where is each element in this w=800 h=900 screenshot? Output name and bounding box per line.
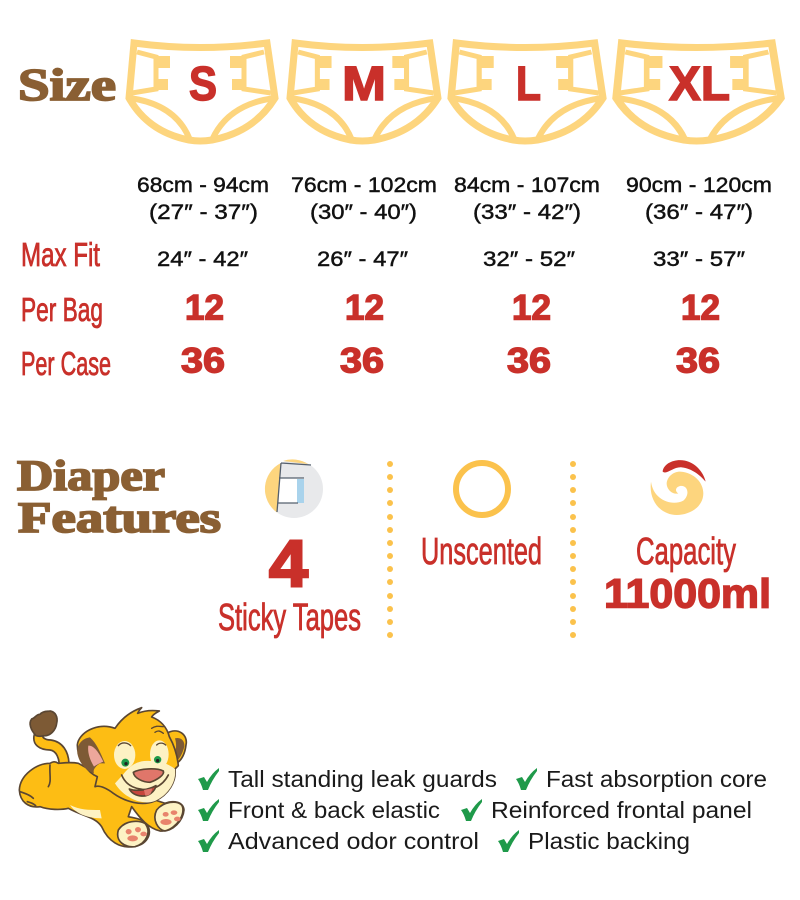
feature: capacity: 11000ml (604, 570, 771, 616)
diaper size L (451, 43, 603, 141)
feature list with check marks: Reinforced frontal panel (491, 797, 752, 823)
divider: dotted left (387, 461, 393, 638)
heading: Diaper Features: Diaper (17, 453, 165, 500)
row: Per Bag: 12 (512, 288, 551, 328)
row: Per Bag (21, 288, 720, 328)
waist measurements row: (30″ - 40″) (310, 201, 417, 224)
row: Max Fit (21, 236, 746, 273)
feature list with check marks: Fast absorption core (546, 766, 767, 792)
waist measurements row: 90cm - 120cm (626, 174, 772, 197)
feature: 4 sticky tapes: Sticky Tapes (218, 597, 361, 639)
diaper size XL: XL (669, 58, 730, 111)
eyes (114, 741, 135, 769)
waist measurements row (137, 174, 772, 224)
heading: Size: Size (18, 59, 116, 110)
front paws (118, 821, 148, 847)
feature list with check marks: Front & back elastic (228, 797, 440, 823)
row: Per Case (21, 342, 720, 382)
icon: sticky tape (265, 459, 323, 518)
brows and forelock (118, 726, 166, 746)
diaper size L: L (516, 58, 541, 111)
diaper size M (290, 43, 438, 141)
toe pads (126, 810, 181, 841)
body (19, 762, 184, 847)
row: Max Fit: 24″ - 42″ (157, 248, 249, 271)
diaper size M: M (342, 58, 386, 111)
row: Per Case: 36 (676, 342, 720, 380)
nose (133, 769, 164, 782)
waist measurements row: (33″ - 42″) (473, 201, 581, 224)
icon: absorption swirl (651, 460, 706, 515)
hind leg line (20, 765, 50, 806)
feature: capacity: Capacity (636, 531, 736, 573)
row: Max Fit: Max Fit (21, 236, 100, 273)
tail (34, 734, 69, 767)
check: plastic backing (498, 830, 519, 852)
waist measurements row: 76cm - 102cm (291, 174, 437, 197)
heading: Diaper Features: Features (18, 495, 221, 542)
feature: 4 sticky tapes: 4 (269, 526, 308, 600)
muzzle (115, 761, 175, 802)
head (77, 708, 178, 803)
row: Per Bag: 12 (345, 288, 384, 328)
mouth (129, 786, 156, 796)
heading: Diaper Features (17, 453, 221, 542)
row: Max Fit: 26″ - 47″ (317, 248, 409, 271)
feature list with check marks: Tall standing leak guards (228, 766, 497, 792)
row: Per Case: 36 (507, 342, 551, 380)
diaper size XL (616, 43, 781, 141)
tail tuft (30, 711, 57, 736)
row: Per Case: 36 (340, 342, 384, 380)
check: odor control (198, 830, 219, 852)
left ear (77, 737, 105, 773)
row: Per Bag: 12 (681, 288, 720, 328)
icon: unscented ring (456, 463, 508, 515)
row: Per Bag: Per Bag (21, 291, 103, 328)
smile (122, 775, 168, 790)
feature: capacity (604, 531, 771, 616)
row: Max Fit: 32″ - 52″ (483, 248, 576, 271)
mascot: lion cub (19, 708, 186, 847)
feature list with check marks (198, 766, 767, 854)
belly (70, 805, 102, 818)
waist measurements row: (27″ - 37″) (149, 201, 258, 224)
diaper size S: S (189, 58, 217, 111)
waist measurements row: 68cm - 94cm (137, 174, 269, 197)
feature: 4 sticky tapes (218, 526, 361, 639)
feature list with check marks: Plastic backing (528, 828, 690, 854)
diaper size S (129, 43, 275, 141)
divider: dotted right (570, 461, 576, 638)
row: Per Case: 36 (181, 342, 225, 380)
check: frontal panel (461, 799, 482, 821)
row: Max Fit: 33″ - 57″ (653, 248, 746, 271)
check: fast absorption (516, 768, 537, 790)
feature: unscented: Unscented (421, 531, 542, 573)
check: leak guards (198, 768, 219, 790)
right ear (163, 731, 186, 763)
waist measurements row: (36″ - 47″) (645, 201, 753, 224)
feature list with check marks: Advanced odor control (228, 828, 479, 854)
check: elastic (198, 799, 219, 821)
row: Per Case: Per Case (21, 345, 111, 382)
row: Per Bag: 12 (185, 288, 224, 328)
waist measurements row: 84cm - 107cm (454, 174, 600, 197)
